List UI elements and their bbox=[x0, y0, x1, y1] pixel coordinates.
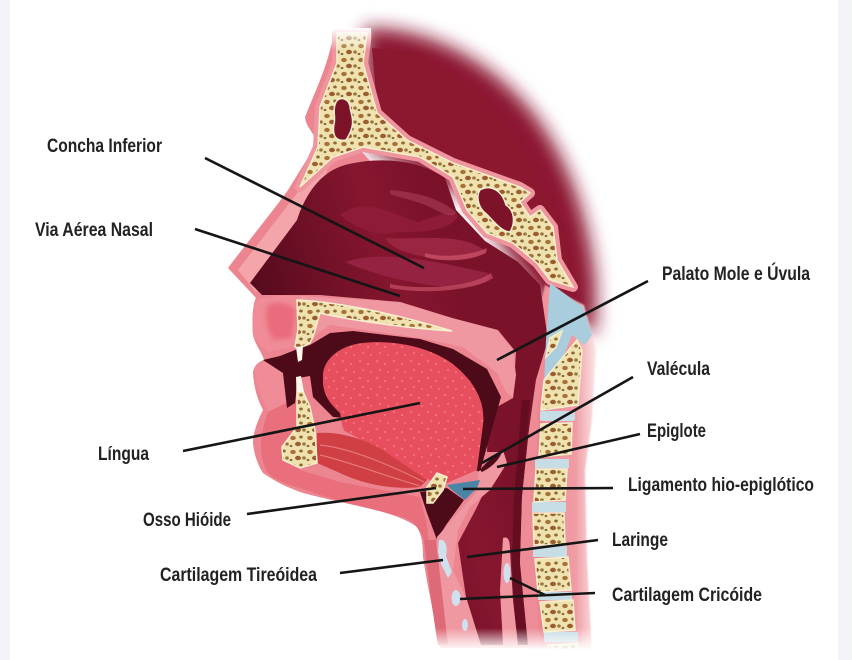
frontal and sphenoid bone bbox=[300, 33, 573, 287]
label: Valécula: Valécula bbox=[647, 359, 710, 380]
thyroid and cricoid cartilage bbox=[438, 540, 468, 631]
hyoid bone bbox=[427, 473, 447, 503]
label: Língua bbox=[98, 403, 420, 465]
upper lip bbox=[253, 296, 330, 352]
nose inner lining bbox=[238, 152, 331, 292]
label: Laringe bbox=[467, 530, 668, 557]
upper jaw bone bbox=[295, 300, 452, 348]
label: Epiglote: Epiglote bbox=[647, 421, 706, 442]
epiglottis and anterior larynx bbox=[436, 450, 507, 645]
label: Via Aérea Nasal: Via Aérea Nasal bbox=[35, 220, 153, 241]
chin soft tissue bbox=[260, 365, 430, 560]
label: Osso Hióide: Osso Hióide bbox=[143, 510, 231, 531]
posterior larynx cartilage bbox=[504, 563, 510, 583]
brain cavity dome bbox=[364, 28, 596, 335]
hio-epiglottic ligament bbox=[447, 480, 480, 500]
neck back tissue bbox=[520, 285, 596, 650]
nasal airway and pharynx bbox=[250, 160, 548, 645]
cervical discs bbox=[532, 411, 578, 642]
label: Concha Inferior bbox=[47, 136, 424, 268]
hard palate and soft palate bbox=[300, 296, 516, 398]
label: Cartilagem Tireóidea: Cartilagem Tireóidea bbox=[160, 565, 317, 586]
label: Via Aérea Nasal bbox=[35, 220, 400, 296]
tongue bbox=[323, 342, 483, 483]
throat dark space bbox=[420, 488, 464, 540]
label: Língua: Língua bbox=[98, 444, 149, 465]
posterior pharyngeal wall bbox=[520, 340, 552, 645]
frontal sinus bbox=[334, 99, 353, 140]
frontal meningeal lining bbox=[300, 33, 573, 287]
front neck deep stripe bbox=[424, 540, 448, 645]
top and bottom fade bbox=[325, 28, 600, 660]
label: Cartilagem Tireóidea bbox=[160, 560, 443, 586]
label: Laringe: Laringe bbox=[612, 530, 668, 551]
posterior larynx wall bbox=[500, 538, 518, 645]
label: Osso Hióide bbox=[143, 488, 436, 531]
label: Valécula bbox=[482, 359, 710, 463]
label: Epiglote bbox=[497, 421, 706, 467]
label: Palato Mole e Úvula bbox=[497, 263, 810, 360]
oral cavity bbox=[263, 331, 501, 472]
prevertebral blue ligament bbox=[544, 283, 592, 385]
vallecula dark pocket bbox=[480, 452, 502, 472]
lower tooth bbox=[296, 376, 304, 392]
label: Ligamento hio-epiglótico: Ligamento hio-epiglótico bbox=[628, 475, 814, 496]
label: Cartilagem Cricóide: Cartilagem Cricóide bbox=[612, 585, 762, 606]
tongue muscle bbox=[317, 433, 427, 488]
label: Cartilagem Cricóide bbox=[460, 578, 762, 606]
lower jaw bone bbox=[282, 378, 317, 468]
upper lip inner muscle bbox=[266, 303, 296, 340]
cervical vertebrae bbox=[533, 331, 582, 660]
nasal conchae bbox=[340, 190, 493, 291]
dark posterior pharynx stripe bbox=[512, 400, 530, 645]
label: Palato Mole e Úvula: Palato Mole e Úvula bbox=[662, 263, 810, 285]
sphenoid sinus bbox=[478, 188, 513, 232]
anatomy illustration bbox=[228, 28, 600, 660]
label: Concha Inferior: Concha Inferior bbox=[47, 136, 162, 157]
facial skin silhouette bbox=[228, 30, 545, 648]
upper tooth bbox=[296, 346, 303, 362]
lower lip bbox=[254, 363, 288, 412]
